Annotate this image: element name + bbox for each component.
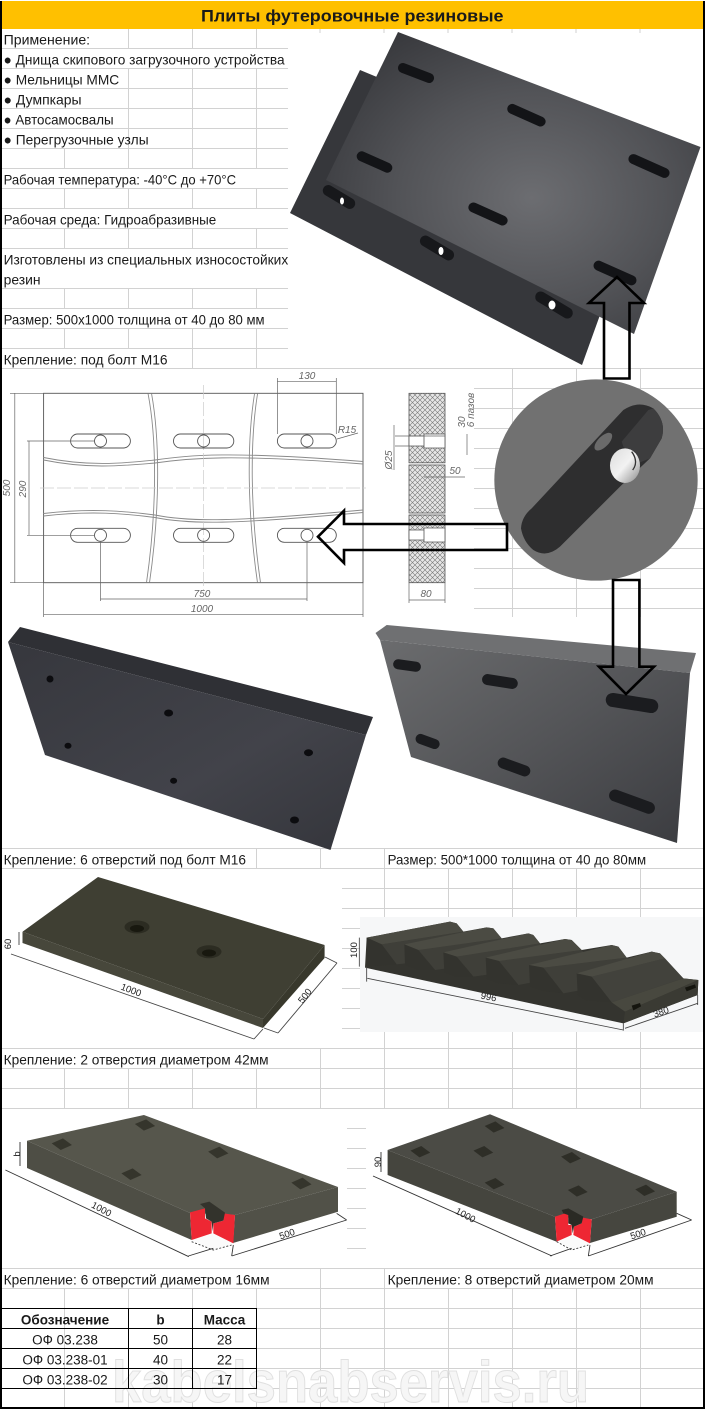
ridge 5 [529,945,645,993]
specification table: Масса [204,1312,246,1328]
dimension labels: 750 [194,589,211,600]
3D render: plate with six square holes: b [12,1151,23,1157]
specification table: b [156,1312,165,1328]
specification table: 17 [217,1372,232,1388]
slots in the drawing [71,434,336,542]
caption: plate size: Размер: 500*1000 толщина от 40 до 80мм [388,852,646,868]
3D render: plate with six square holes: 1000 [89,1200,113,1220]
arrow: up to top photo [589,277,644,378]
caption: six holes 16 mm: Крепление: 6 отверстий диаметром 16мм [4,1272,270,1288]
caption: two holes 42 mm: Крепление: 2 отверстия диаметром 42мм [4,1052,269,1068]
technical drawing: plate section: 50 [449,466,461,477]
specification table: 50 [153,1332,168,1348]
ridge 3 [443,933,557,977]
3D render: ridged plate: 996 [480,991,497,1004]
3D render: plate with eight square holes: 500 [629,1227,647,1242]
technical drawing: plate front view [2,371,366,617]
specification table: 40 [153,1352,168,1368]
specification table: ОФ 03.238-02 [22,1372,108,1388]
specification table: ОФ 03.238-01 [22,1352,108,1368]
text block: properties: ● Автосамосвалы [4,112,114,128]
dimension labels: 130 [299,371,316,382]
specification table: 22 [217,1352,232,1368]
dimension lines [10,378,363,617]
3D render: plate with six square holes: 500 [278,1227,296,1242]
3D render: plate with eight square holes: 90 [373,1157,384,1167]
arrow: from circle to drawing [318,511,507,563]
3D render: plate with two holes: 500 [296,987,315,1006]
text block: properties: Изготовлены из специальных износостойких [4,252,288,268]
arrow: from circle down to photo [599,580,654,694]
technical drawing: plate section: Ø25 [384,450,395,470]
dimension labels: 290 [18,480,29,498]
text block: properties: ● Думпкары [4,92,82,108]
3D render: plate with eight square holes: 1000 [453,1206,477,1226]
3D render: ridged plate: 380 [652,1005,670,1020]
dimension labels: R15 [338,425,357,436]
text block: properties: Рабочая температура: -40°C до +70°C [4,172,236,188]
photo: two slotted plates [290,32,700,365]
dimension labels: 500 [2,479,13,496]
dimension labels [2,371,357,615]
text block: properties: Рабочая среда: Гидроабразивные [4,212,216,228]
spreadsheet grid background [0,368,705,1408]
3D render: plate with two holes: 1000 [119,982,143,1000]
3D render: plate with two holes: 60 [3,939,14,949]
title bar: Плиты футеровочные резиновые [201,6,504,26]
text block: properties: ● Мельницы ММС [4,72,119,88]
3D render: plate with six square holes [5,1115,347,1257]
title bar [1,1,705,29]
ridge 1 [367,922,480,967]
specification table: 28 [217,1332,232,1348]
ridge 6 [577,952,683,1002]
caption: six holes M16: Крепление: 6 отверстий под болт М16 [4,852,246,868]
3D render: plate with two holes [3,877,337,1039]
technical drawing: plate section: 30 [457,416,468,428]
text block: properties: ● Днища скипового загрузочного устройства [4,52,285,68]
technical drawing: plate section [384,393,477,603]
specification table: ОФ 03.238 [32,1332,98,1348]
specification table: Обозначение [21,1312,110,1328]
close-up circle: slot with bolt hole [494,379,698,581]
technical drawing: plate section: 80 [420,589,432,600]
3D render: ridged plate [349,917,705,1032]
caption: eight holes 20 mm: Крепление: 8 отверстий диаметром 20мм [388,1272,654,1288]
dimension labels: 1000 [191,604,214,615]
photo: plate with six round holes [8,627,373,850]
3D render: ridged plate: 100 [349,942,360,958]
text block: properties: ● Перегрузочные узлы [4,132,149,148]
text block: properties [4,32,288,368]
specification table [2,1308,256,1388]
specification table: 30 [153,1372,168,1388]
ridge 2 [404,927,518,970]
3D render: plate with eight square holes [373,1114,692,1256]
ridge 4 [486,939,598,985]
text block: properties: Крепление: под болт М16 [4,352,168,368]
text block: properties: Размер: 500х1000 толщина от 40 до 80 мм [4,312,265,328]
photo: plate with six slots [376,625,696,843]
text block: properties: Применение: [4,32,90,48]
text block: properties: резин [4,272,41,288]
technical drawing: plate section: 6 пазов [466,393,477,427]
grid of the top text block [2,29,705,368]
